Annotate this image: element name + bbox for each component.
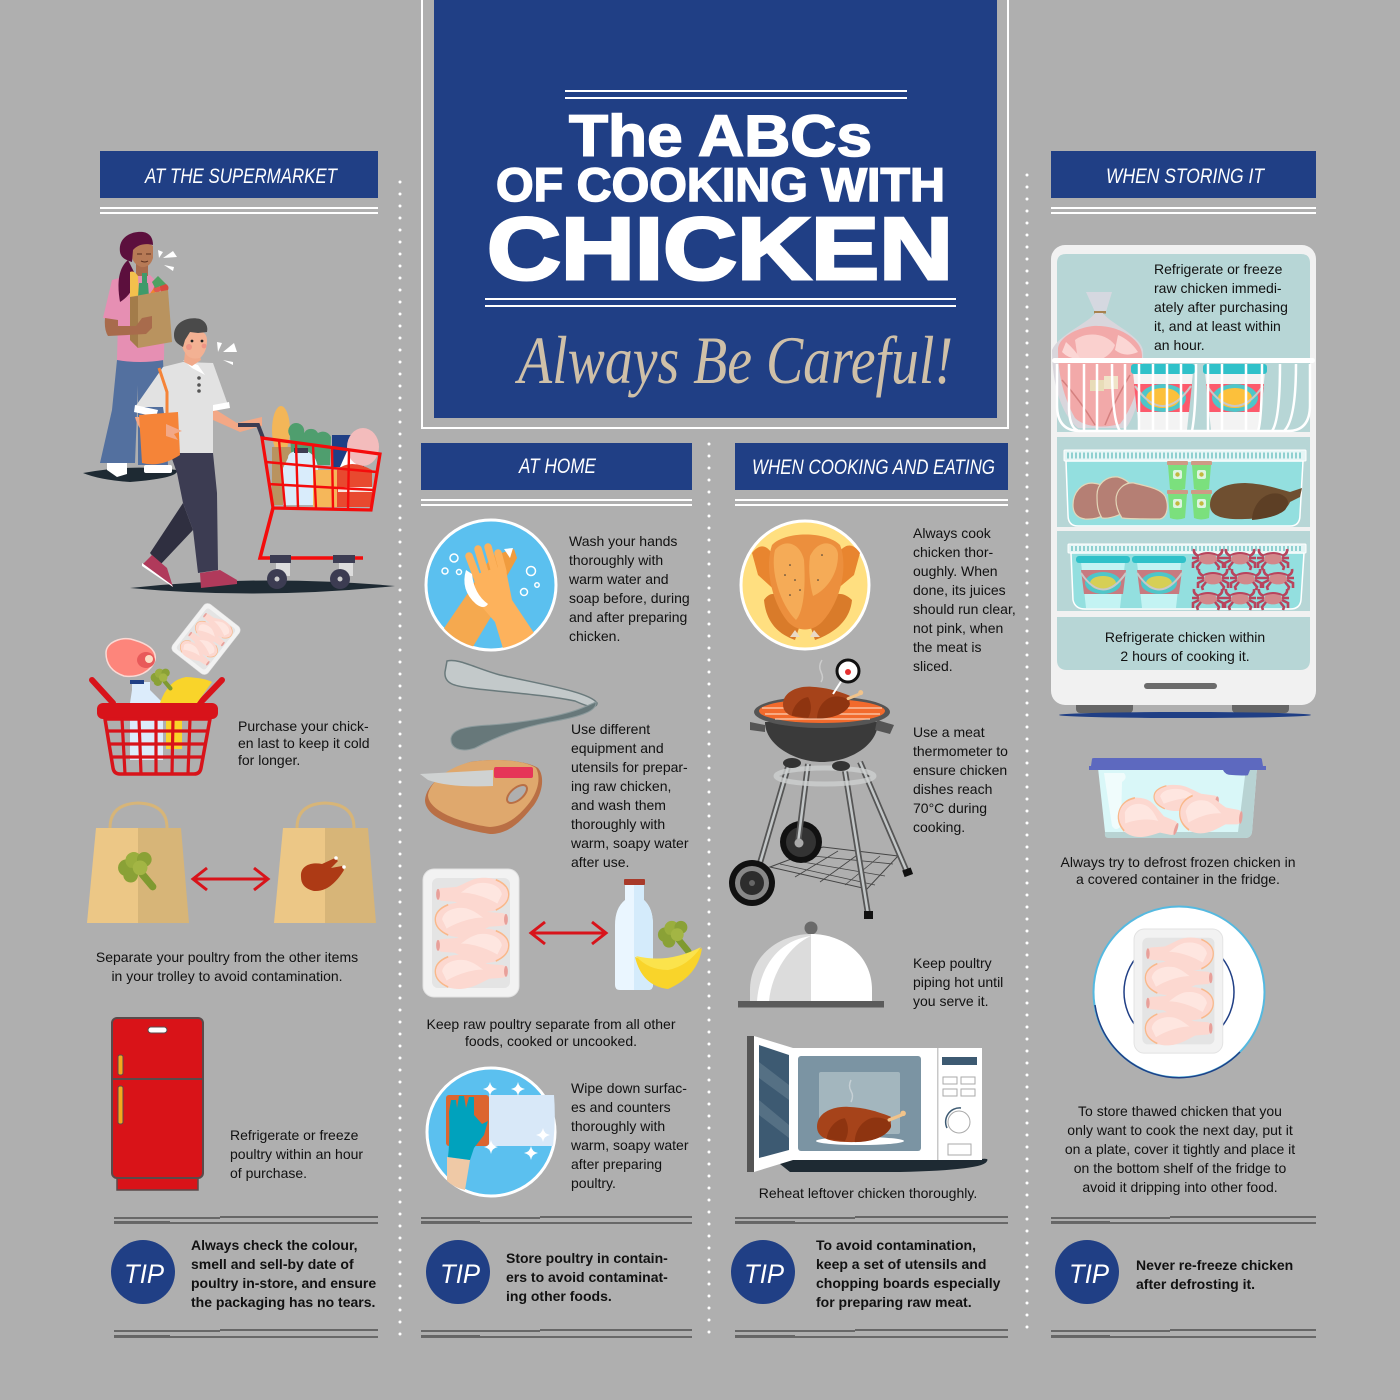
text: wipe surfaces: after preparing (571, 1156, 662, 1172)
text: refrigerate raw chicken: ately after purchasing (1154, 299, 1288, 315)
dotted column dividers (400, 175, 1027, 1335)
tip 4: TIP (1069, 1259, 1109, 1289)
tip 3 (731, 1217, 1008, 1337)
text: different equipment: ing raw chicken, (571, 778, 671, 794)
tip 3: TIP (744, 1259, 784, 1289)
text: meat thermometer: 70°C during (913, 800, 987, 816)
tip 3: keep a set of utensils and (816, 1256, 986, 1272)
heading: at the supermarket (100, 151, 378, 214)
text: different equipment: warm, soapy water (570, 835, 689, 851)
tip 1: TIP (124, 1259, 164, 1289)
heading: when storing it (1051, 151, 1316, 214)
heading: when cooking and eating (735, 443, 1008, 506)
text: keep hot: Keep poultry (913, 955, 992, 971)
text: purchase last: Purchase your chick- (238, 718, 369, 734)
icon: cooked chicken (741, 521, 869, 649)
illustration: man pushing trolley (130, 318, 395, 594)
text: cook thoroughly: chicken thor- (913, 544, 993, 560)
container: meat, cups and roast (1064, 450, 1306, 526)
text: purchase last: en last to keep it cold (238, 735, 370, 751)
text: separate poultry: in your trolley to avoid contamination. (111, 968, 343, 984)
container: buckets and crabs (1068, 544, 1306, 610)
tip 2: ing other foods. (506, 1288, 612, 1304)
heading: at home: AT HOME (517, 455, 597, 478)
text: thawed chicken: on a plate, cover it tightly and place it (1065, 1141, 1295, 1157)
tip 1: Always check the colour, (191, 1237, 358, 1253)
text: meat thermometer: Use a meat (913, 724, 985, 740)
text: refrigerate raw chicken: an hour. (1154, 337, 1205, 353)
wire shelf (1052, 358, 1315, 431)
text: wash hands: soap before, during (569, 590, 690, 606)
icon: bag with chicken (274, 803, 376, 923)
tip 2: ers to avoid contaminat- (506, 1269, 668, 1285)
text: wipe surfaces: es and counters (571, 1099, 671, 1115)
text: refrigerate raw chicken: raw chicken immedi- (1154, 280, 1282, 296)
text: keep raw separate: Keep raw poultry separate from all other (426, 1016, 676, 1032)
text: wash hands: and after preparing (569, 609, 687, 625)
text: refrigerate raw chicken: Refrigerate or freeze (1154, 261, 1283, 277)
text: thawed chicken: only want to cook the next day, put it (1067, 1122, 1293, 1138)
heading: when storing it: WHEN STORING IT (1106, 165, 1266, 188)
illustration: separated bags (87, 803, 376, 923)
tip 1: poultry in-store, and ensure (191, 1275, 376, 1291)
icon: microwave (747, 1036, 988, 1172)
text: defrost: a covered container in the fridge. (1076, 871, 1280, 887)
text: different equipment: Use different (571, 721, 650, 737)
text: thawed chicken: avoid it dripping into other food. (1082, 1179, 1278, 1195)
tip 3: To avoid contamination, (816, 1237, 976, 1253)
text: wash hands: warm water and (568, 571, 669, 587)
icon: barbecue grill with thermometer (729, 660, 913, 919)
icon: washing hands (426, 520, 556, 655)
text: wash hands: thoroughly with (569, 552, 663, 568)
tip 2 (421, 1217, 692, 1337)
text: wipe surfaces: poultry. (571, 1175, 616, 1191)
text: reheat: Reheat leftover chicken thoroughly. (759, 1185, 977, 1201)
title: of cooking with: OF COOKING WITH (496, 158, 945, 211)
illustration: woman with grocery bag (83, 232, 177, 482)
text: meat thermometer: ensure chicken (913, 762, 1007, 778)
tip 1: the packaging has no tears. (191, 1294, 375, 1310)
subtitle: Always Be Careful! (515, 322, 953, 398)
text: refrigerate within 2 hours: 2 hours of cooking it. (1120, 648, 1250, 664)
icon: tray of raw chicken (423, 869, 519, 997)
heading: when cooking and eating: WHEN COOKING AND EATING (752, 456, 995, 479)
bagged chicken (1052, 292, 1143, 428)
icon: wiping surface (427, 1068, 555, 1196)
icon: tongs (445, 660, 597, 750)
illustration: shopping trolley (260, 406, 380, 589)
text: different equipment: after use. (571, 854, 629, 870)
text: refrigerate within an hour: poultry within an hour (230, 1146, 363, 1162)
text: keep hot: you serve it. (913, 993, 988, 1009)
icon: plate with tray of chicken (1094, 906, 1264, 1078)
tip 4 (1051, 1217, 1316, 1337)
text: refrigerate within an hour: Refrigerate or freeze (230, 1127, 359, 1143)
icon: bag with broccoli (87, 803, 189, 923)
tip 3: chopping boards especially (816, 1275, 1001, 1291)
text: wash hands: Wash your hands (569, 533, 677, 549)
text: different equipment: thoroughly with (571, 816, 665, 832)
title: chicken: CHICKEN (487, 199, 953, 298)
arrow: double headed (193, 868, 268, 890)
text: wipe surfaces: warm, soapy water (570, 1137, 689, 1153)
text: different equipment: equipment and (571, 740, 664, 756)
tip 4: Never re-freeze chicken (1136, 1257, 1293, 1273)
text: cook thoroughly: sliced. (913, 658, 953, 674)
icon: serving cloche (738, 922, 884, 1008)
text: refrigerate raw chicken: it, and at least within (1154, 318, 1281, 334)
heading: at the supermarket: AT THE SUPERMARKET (143, 165, 339, 188)
tip 2: TIP (440, 1259, 480, 1289)
text: meat thermometer: cooking. (913, 819, 965, 835)
title: The ABCs: The ABCs (569, 104, 872, 169)
icon: covered container with chicken (1089, 758, 1266, 849)
text: thawed chicken: To store thawed chicken that you (1078, 1103, 1282, 1119)
arrow: keep separate (531, 922, 606, 944)
text: wipe surfaces: Wipe down surfac- (571, 1080, 687, 1096)
text: different equipment: utensils for prepar- (571, 759, 688, 775)
text: cook thoroughly: the meat is (913, 639, 981, 655)
text: cook thoroughly: Always cook (913, 525, 992, 541)
panel: open fridge (1051, 245, 1316, 718)
tip 1: smell and sell-by date of (191, 1256, 354, 1272)
text: thawed chicken: on the bottom shelf of the fridge to (1074, 1160, 1286, 1176)
text: cook thoroughly: should run clear, (913, 601, 1016, 617)
text: wash hands: chicken. (569, 628, 620, 644)
tip 1 (111, 1217, 378, 1337)
text: cook thoroughly: oughly. When (913, 563, 998, 579)
text: keep raw separate: foods, cooked or uncooked. (465, 1033, 637, 1049)
icon: red fridge (112, 1018, 203, 1190)
text: defrost: Always try to defrost frozen chicken in (1060, 854, 1296, 870)
text: meat thermometer: thermometer to (913, 743, 1008, 759)
icon: milk, broccoli, banana (615, 879, 702, 990)
text: refrigerate within an hour: of purchase. (230, 1165, 307, 1181)
title panel (422, 0, 1008, 428)
heading: at home (421, 443, 692, 506)
buckets (1131, 364, 1195, 430)
text: meat thermometer: dishes reach (913, 781, 992, 797)
text: separate poultry: Separate your poultry from the other items (96, 949, 358, 965)
text: different equipment: and wash them (571, 797, 666, 813)
illustration: basket with groceries (92, 601, 242, 774)
text: purchase last: for longer. (238, 752, 300, 768)
text: keep hot: piping hot until (913, 974, 1003, 990)
text: cook thoroughly: done, its juices (913, 582, 1006, 598)
tip 4: after defrosting it. (1136, 1276, 1255, 1292)
tip 3: for preparing raw meat. (816, 1294, 972, 1310)
text: refrigerate within 2 hours: Refrigerate chicken within (1105, 629, 1265, 645)
tip 2: Store poultry in contain- (506, 1250, 668, 1266)
text: cook thoroughly: not pink, when (913, 620, 1003, 636)
text: wipe surfaces: thoroughly with (571, 1118, 665, 1134)
icon: knife and cutting board (420, 760, 542, 834)
